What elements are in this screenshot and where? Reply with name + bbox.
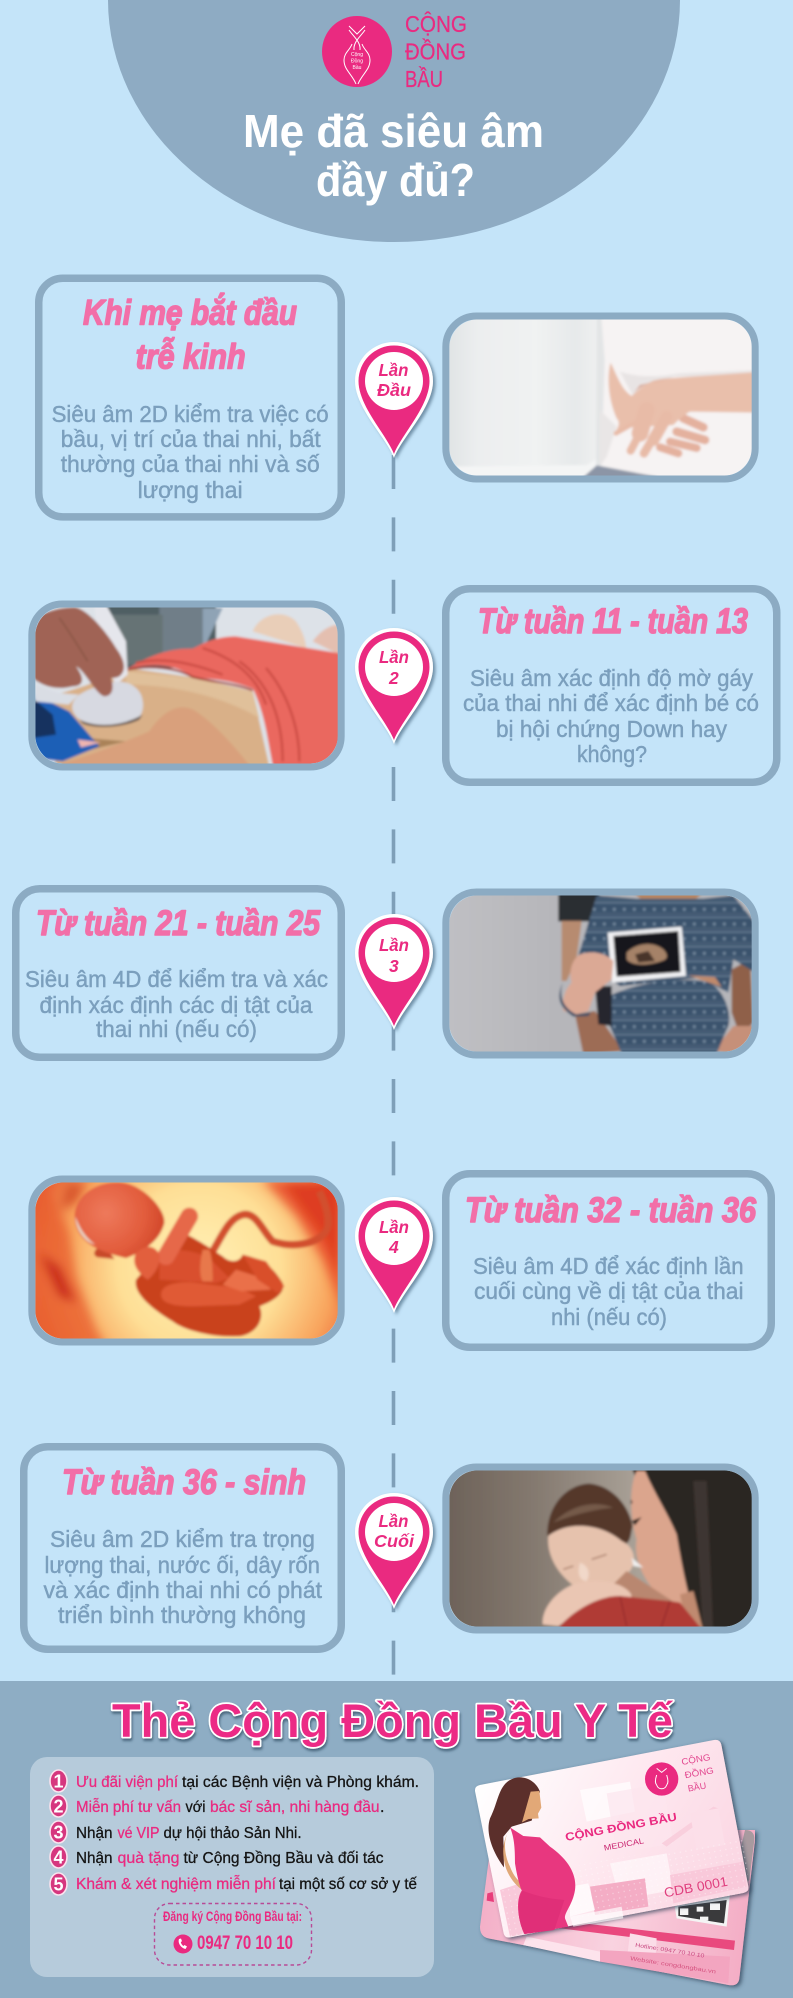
panel heading [83,292,297,376]
header semi-ellipse [108,0,680,242]
benefit 5: tại một số cơ sở y tế [279,1876,417,1893]
benefit 5 [50,1873,417,1895]
logo emblem: Đồng [351,58,363,64]
timeline dashed line [392,455,395,1681]
photo: ultrasound probe on belly [26,598,348,774]
card name: CỘNG ĐỒNG BẦU [564,1811,678,1844]
benefit 3: vé VIP [118,1825,160,1842]
logo wordmark: ĐỒNG [405,38,466,64]
panel body text [52,401,329,503]
panel body text: lượng thai [138,477,243,503]
card subtitle: MEDICAL [603,1836,645,1853]
photo: fetus in womb [26,1173,348,1349]
panel heading: trễ kinh [136,336,246,376]
card logo: CỘNG [680,1751,711,1767]
woman illustration [489,1777,575,1934]
benefit 1: Ưu đãi viện phí [76,1774,179,1791]
logo [322,10,467,92]
panel body text: cuối cùng về dị tật của thai [474,1278,744,1304]
panel body text: Siêu âm 2D kiểm tra việc có [52,401,329,427]
panel heading: Khi mẹ bắt đầu [83,292,297,332]
benefit 3 [50,1821,302,1843]
main title: đầy đủ? [316,154,475,206]
benefit 2: với [186,1799,206,1816]
benefit 4 [50,1846,384,1868]
pin: Lần 2 [355,628,433,744]
pin: Lần 2: Lần [379,647,409,667]
logo emblem [322,16,392,87]
benefit 4: Nhận [76,1850,112,1867]
panel: week 32-36 text [446,1174,771,1347]
photo frame [446,316,755,479]
footer band [0,1681,793,1998]
pin: Lần Cuối: Cuối [374,1531,415,1551]
icon: phone [174,1934,192,1954]
registration callout: Đăng ký Cộng Đồng Bầu tại: [163,1909,302,1924]
benefit 4: quà tặng [118,1850,180,1867]
main title [243,105,544,206]
panel body text: Siêu âm 2D kiểm tra trọng [50,1526,315,1552]
pin: Lần 4: 4 [388,1237,399,1257]
benefit 3: Nhận [76,1825,112,1842]
logo wordmark: CỘNG [405,10,467,37]
photo: couple holding sonogram [440,886,762,1062]
panel: week 36 to birth text [24,1447,341,1649]
logo wordmark: BẦU [405,65,443,92]
pin: Lần 4: Lần [379,1217,409,1237]
panel body text: Siêu âm 4D để kiểm tra và xác [25,966,328,992]
panel body text: bị hội chứng Down hay [496,716,727,742]
logo wordmark [405,10,467,92]
pin: Lần 3 [355,914,433,1030]
back card: Website: congdongbau.vn [630,1956,716,1976]
benefit 2: . [380,1799,384,1816]
panel body text: định xác định các dị tật của [40,992,313,1018]
card number: CDB 0001 [663,1874,729,1900]
pin: Lần Đầu [355,342,433,458]
panel body text: và xác định thai nhi có phát [44,1577,323,1603]
main title: Mẹ đã siêu âm [243,105,544,157]
photo: hands on belly [440,310,762,486]
panel: first scan text [39,278,341,517]
benefit 2: Miễn phí tư vấn [76,1797,181,1816]
card logo: BẦU [687,1780,707,1794]
photo frame [446,892,755,1055]
pin: Lần 3: 3 [389,956,399,976]
pin: Lần 3: Lần [379,935,409,955]
card logo [645,1751,717,1796]
medical cards [475,1740,755,1985]
benefit 1 [50,1770,419,1792]
panel heading: Từ tuần 21 - tuần 25 [36,904,320,943]
panel body text [473,1253,744,1330]
registration callout: 0947 70 10 10 [197,1933,293,1954]
panel body text: thai nhi (nếu có) [96,1016,257,1042]
panel: week 11-13 text [446,589,777,782]
panel body text: thường của thai nhi và số [61,451,320,477]
benefit 1: tại các Bệnh viện và Phòng khám. [182,1774,419,1791]
benefits box [30,1757,434,1977]
benefit 1: 1 [54,1772,64,1792]
panel body text [44,1526,323,1628]
pin: Lần Cuối [355,1493,433,1609]
benefit 2: 2 [54,1796,64,1816]
benefit 5: 5 [54,1874,64,1894]
benefit 3: dự hội thảo Sản Nhi. [164,1825,302,1842]
photo: mother and newborn [440,1461,762,1638]
panel body text: bầu, vị trí của thai nhi, bất [61,426,321,452]
panel body text: Siêu âm 4D để xác định lần [473,1253,744,1279]
pin: Lần 4 [355,1197,433,1313]
back card: Hotline: 0947 70 10 10 [635,1943,705,1960]
pin: Lần Đầu: Lần [378,360,408,380]
panel body text: của thai nhi để xác định bé có [463,690,759,716]
benefit 3: 3 [54,1822,64,1842]
panel body text: triển bình thường không [58,1602,306,1628]
benefit 4: 4 [54,1848,64,1868]
pin: Lần 2: 2 [388,668,399,688]
panel: week 21-25 text [16,889,341,1057]
logo emblem: Cộng [351,52,363,58]
panel body text [25,966,328,1042]
photo frame [446,1467,755,1630]
pin: Lần Cuối: Lần [378,1511,408,1531]
panel heading: Từ tuần 36 - sinh [62,1463,306,1502]
panel body text: không? [577,741,647,767]
card logo: ĐỒNG [684,1764,715,1780]
panel body text: Siêu âm xác định độ mờ gáy [470,665,753,691]
benefit 2: bác sĩ sản, nhi hàng đầu [210,1799,380,1816]
pin: Lần Đầu: Đầu [377,380,411,400]
logo emblem: Bầu [353,65,362,71]
benefit 4: từ Cộng Đồng Bầu và đối tác [184,1850,384,1867]
benefit 5: Khám & xét nghiệm miễn phí [76,1874,277,1893]
registration callout [154,1904,312,1965]
panel heading: Từ tuần 32 - tuần 36 [465,1191,756,1230]
photo frame [32,1179,341,1342]
footer title: Thẻ Cộng Đồng Bầu Y Tế [112,1694,674,1747]
front card [475,1740,748,1937]
panel body text [463,665,759,767]
benefit 2 [50,1795,384,1817]
photo frame [32,604,341,767]
card pattern [497,1782,748,1937]
panel body text: nhi (nếu có) [551,1304,667,1330]
panel body text: lượng thai, nước ối, dây rốn [44,1552,320,1578]
back card [480,1830,755,1985]
